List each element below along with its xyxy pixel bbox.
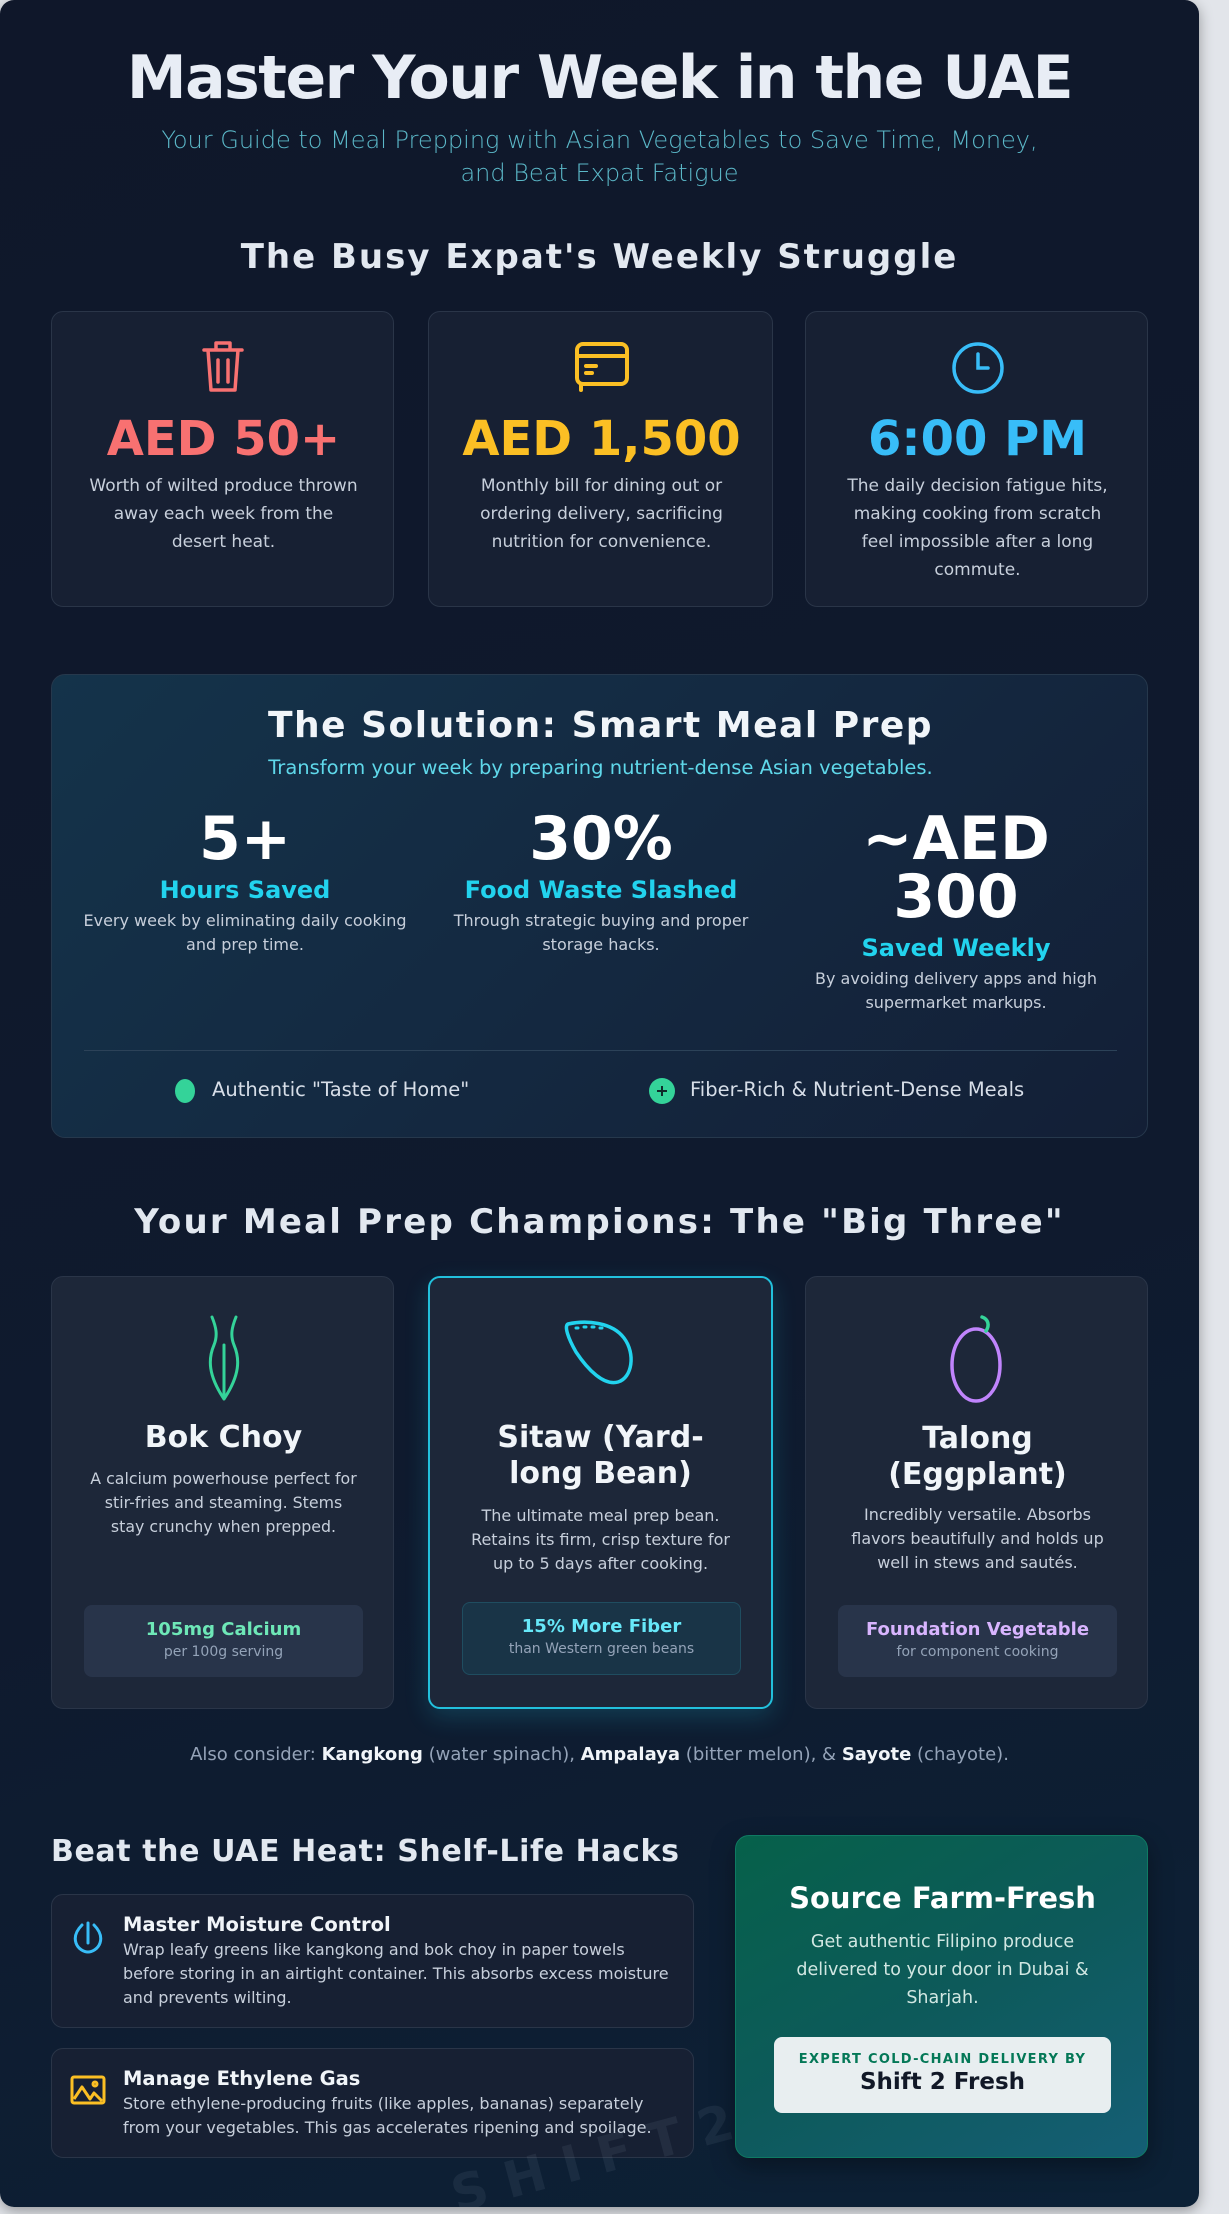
- feature: taste of home: Authentic "Taste of Home": [212, 1078, 469, 1101]
- description: Worth of wilted produce thrown away each week from the desert heat.: [89, 476, 358, 552]
- badge: Shift 2 Fresh: EXPERT COLD-CHAIN DELIVERY BY: [799, 2052, 1086, 2067]
- description: The daily decision fatigue hits, making cooking from scratch feel impossible after a long commute.: [847, 476, 1108, 580]
- icon: bok choy: [208, 1316, 240, 1401]
- icon: drop: [74, 1922, 102, 1954]
- name: [497, 1420, 704, 1491]
- title: Master Your Week in the UAE: [127, 43, 1072, 113]
- text: Wrap leafy greens like kangkong and bok choy in paper towels before storing in an airtight container. This absorbs excess moisture and prevents wilting.: [123, 1940, 669, 2007]
- title: Manage Ethylene Gas: [123, 2067, 360, 2090]
- name: long Bean): [509, 1456, 692, 1491]
- badge: [462, 1602, 741, 1675]
- stat: money: By avoiding delivery apps and high supermarket markups.: [815, 969, 1097, 1012]
- card: wasted produce: [51, 311, 394, 607]
- badge: than Western green beans: [509, 1641, 694, 1657]
- badge: 15% More Fiber: [522, 1616, 681, 1637]
- badge: [84, 1605, 363, 1677]
- icon: bean: [564, 1320, 633, 1384]
- icon: image: [70, 2076, 106, 2104]
- name: [888, 1421, 1067, 1492]
- name: Talong: [922, 1421, 1033, 1456]
- stat: waste: Food Waste Slashed: [465, 876, 737, 904]
- stat: money: Saved Weekly: [862, 934, 1050, 962]
- badge: 105mg Calcium: [146, 1619, 301, 1640]
- heading: struggle: The Busy Expat's Weekly Struggle: [241, 237, 958, 277]
- heading: champions: Your Meal Prep Champions: The "Big Three": [134, 1202, 1065, 1242]
- badge: per 100g serving: [164, 1644, 283, 1660]
- card: bok choy: [51, 1276, 394, 1709]
- stat: AED 1,500: [462, 411, 741, 467]
- badge: for component cooking: [897, 1644, 1058, 1660]
- name: (Eggplant): [888, 1457, 1067, 1492]
- icon: card: [575, 342, 629, 392]
- icon: leaf: [175, 1079, 195, 1103]
- stat: money: [815, 804, 1097, 1012]
- subtitle: Your Guide to Meal Prepping with Asian Vegetables to Save Time, Money, and Beat Expat Fatigue: [161, 126, 1038, 187]
- stat: AED 50+: [107, 411, 340, 467]
- description: A calcium powerhouse perfect for stir-fries and steaming. Stems stay crunchy when prepped.: [90, 1469, 357, 1536]
- text: Store ethylene-producing fruits (like apples, bananas) separately from your vegetables. This gas accelerates ripening and spoilage.: [123, 2094, 652, 2137]
- badge: Shift 2 Fresh: Shift 2 Fresh: [860, 2069, 1025, 2095]
- stat: hours: 5+: [199, 804, 291, 874]
- name: Bok Choy: [145, 1420, 302, 1455]
- name: Sitaw (Yard-: [497, 1420, 704, 1455]
- hack: moisture: [51, 1894, 694, 2028]
- icon: clock: [952, 342, 1004, 394]
- icon: eggplant: [950, 1315, 1002, 1403]
- badge: Shift 2 Fresh: [774, 2037, 1111, 2113]
- stat: 6:00 PM: [868, 411, 1087, 467]
- stat: waste: [454, 804, 748, 954]
- description: The ultimate meal prep bean. Retains its firm, crisp texture for up to 5 days after cooking.: [471, 1506, 730, 1573]
- icon: trash: [202, 341, 244, 392]
- badge: [838, 1605, 1117, 1677]
- stat: money: ~AED 300: [862, 804, 1050, 932]
- icon: plus: [649, 1078, 675, 1104]
- stat: waste: 30%: [529, 804, 673, 874]
- title: Master Moisture Control: [123, 1913, 391, 1936]
- text: Get authentic Filipino produce delivered to your door in Dubai & Sharjah.: [796, 1932, 1089, 2008]
- panel: solution: [51, 674, 1148, 1138]
- heading: solution: The Solution: Smart Meal Prep: [268, 705, 933, 746]
- stat: waste: Through strategic buying and proper storage hacks.: [454, 911, 748, 954]
- card: sitaw (highlighted): [428, 1276, 773, 1709]
- note: also consider: Also consider: Kangkong (water spinach), Ampalaya (bitter melon), & Sayote (chayote).: [190, 1744, 1009, 1765]
- card: talong: [805, 1276, 1148, 1709]
- stat: hours: Hours Saved: [160, 876, 330, 904]
- hack: ethylene: [51, 2048, 694, 2158]
- description: Monthly bill for dining out or ordering delivery, sacrificing nutrition for convenience.: [480, 476, 723, 552]
- heading: shelf-life hacks: Beat the UAE Heat: Shelf-Life Hacks: [51, 1834, 680, 1869]
- heading: Source Farm-Fresh: [789, 1881, 1096, 1915]
- subtitle: Transform your week by preparing nutrient-dense Asian vegetables.: [268, 756, 933, 779]
- panel: big three cards: [51, 1276, 1148, 1724]
- stat: hours: [84, 804, 406, 954]
- feature: fiber: Fiber-Rich & Nutrient-Dense Meals: [690, 1078, 1024, 1101]
- card: dining bill: [428, 311, 773, 607]
- stat: hours: Every week by eliminating daily cooking and prep time.: [84, 911, 406, 954]
- panel: CTA: [735, 1835, 1148, 2158]
- card: decision fatigue: [805, 311, 1148, 607]
- description: Incredibly versatile. Absorbs flavors beautifully and holds up well in stews and sautés.: [851, 1505, 1104, 1572]
- panel: struggle cards: [51, 311, 1148, 607]
- badge: Foundation Vegetable: [866, 1619, 1089, 1640]
